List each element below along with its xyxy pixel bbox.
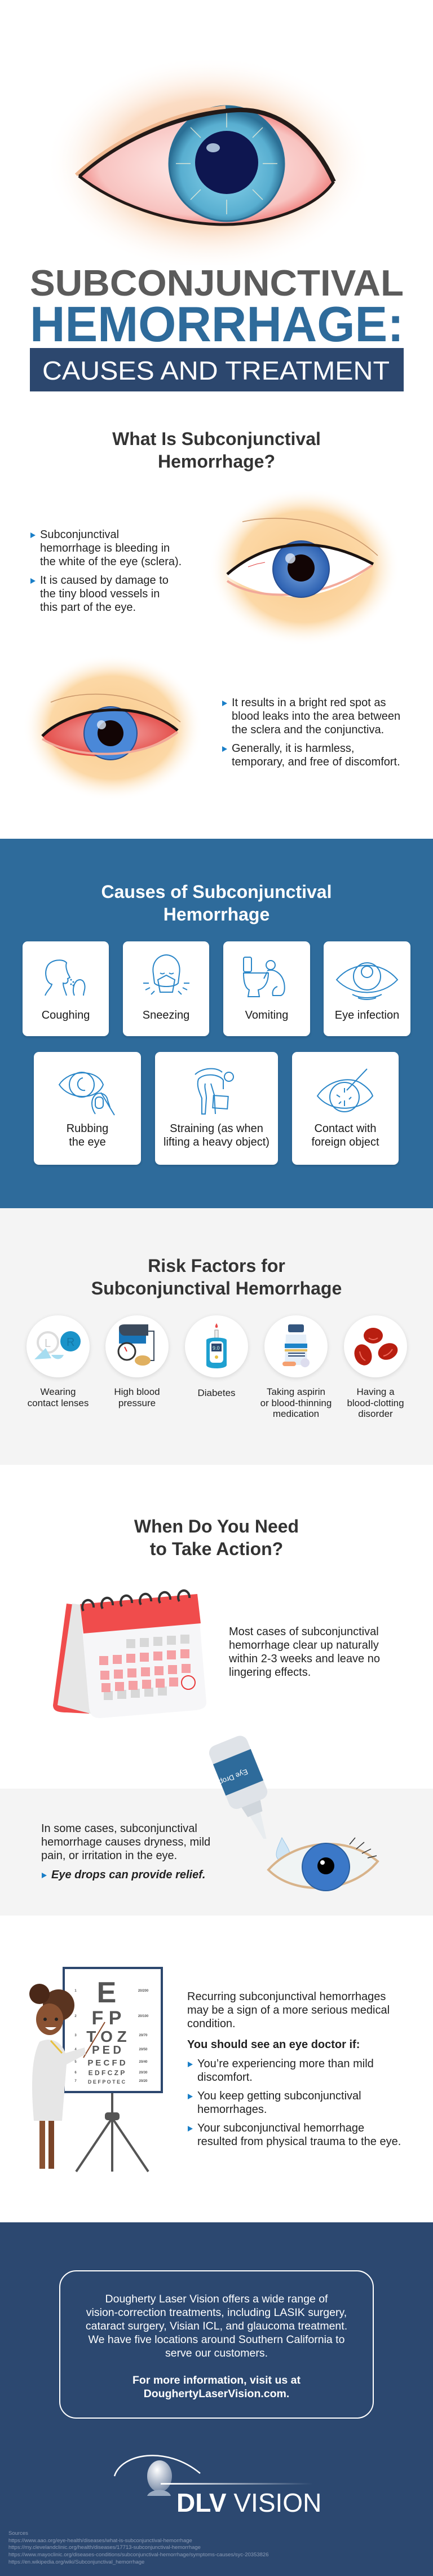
icon: doctor with eye chart: 4 [74,2048,77,2051]
heading: causes: Hemorrhage [164,904,269,924]
card: rubbing eye: Rubbing [67,1122,108,1135]
icon: doctor with eye chart: 20/100 [138,2015,149,2018]
callout: about DLV: Dougherty Laser Vision offers a wide range of [105,2293,328,2305]
hero: red eye illustration [69,72,347,255]
icon: doctor with eye chart: 20/40 [139,2060,148,2064]
text block: sources: https://www.aao.org/eye-health/diseases/what-is-subconjunctival-hemorrhage [8,2538,192,2544]
label: clotting: Having a [356,1386,395,1397]
icon: blood cells [344,1315,407,1377]
label: diabetes: Diabetes [197,1388,236,1398]
icon: doctor with eye chart: 20/70 [139,2034,148,2037]
icon: calendar [53,1589,206,1718]
icon: doctor with eye chart: P E D [92,2044,121,2057]
heading: causes [101,882,332,924]
text block: definition bullets [30,529,182,614]
text block: recurring & see doctor: discomfort. [197,2071,253,2084]
text block: recurring & see doctor: may be a sign of a more serious medical [187,2004,390,2016]
callout: about DLV: We have five locations around Southern California to [89,2333,344,2346]
label: blood pressure: pressure [118,1398,156,1408]
icon: doctor with eye chart: E [97,1976,116,2009]
card: coughing [23,941,109,1036]
card: vomiting: Vomiting [245,1009,288,1021]
card: rubbing eye: the eye [69,1136,106,1148]
label: contact lenses: contact lenses [28,1398,89,1408]
icon: doctor with eye chart: 3 [74,2034,77,2037]
panel: gray band [0,1789,433,1916]
icon: eye drops bottle [209,1736,267,1839]
text block: sources [8,2530,268,2565]
title [30,265,404,391]
card: foreign object: foreign object [311,1136,379,1148]
heading: risk factors: Risk Factors for [148,1256,285,1276]
heading: risk factors [91,1256,342,1298]
text block: sources: https://en.wikipedia.org/wiki/Subconjunctival_hemorrhage [8,2559,144,2565]
icon: doctor with eye chart: 20/30 [139,2071,148,2075]
label: clotting [347,1386,404,1419]
label: medication: Taking aspirin [267,1386,325,1397]
icon: doctor with eye chart: 7 [74,2080,77,2083]
heading: take action: to Take Action? [150,1539,283,1559]
text block: recurring & see doctor: You keep getting subconjunctival [197,2090,361,2102]
card: vomiting [223,941,310,1036]
icon: medication [264,1315,328,1377]
card: eye infection [324,941,410,1036]
icon: diabetes meter: 9.0 [213,1345,220,1351]
icon: doctor with eye chart: F P [92,2007,121,2029]
text block: definition bullets: hemorrhage is bleeding in [40,542,170,554]
icon: doctor with eye chart: 5 [74,2060,77,2064]
text block: definition bullets: the tiny blood vessels in [40,588,160,600]
text block: eye drops: In some cases, subconjunctival [41,1822,197,1835]
heading: take action: When Do You Need [134,1516,299,1536]
callout: about DLV: vision-correction treatments, including LASIK surgery, [86,2306,347,2319]
icon: contact lenses [26,1315,90,1377]
text block: recurring & see doctor [187,1991,401,2148]
text block: red spot bullets: the sclera and the conjunctiva. [232,724,384,736]
heading: what is [112,429,321,472]
icon: doctor with eye chart: 20/50 [139,2048,148,2051]
text block: recurring & see doctor: Recurring subconjunctival hemorrhages [187,1991,386,2003]
text block: definition bullets: the white of the eye (sclera). [40,556,182,568]
label: medication: or blood-thinning [260,1398,332,1408]
label: blood pressure: High blood [114,1386,160,1397]
text block: sources: https://my.clevelandclinic.org/health/diseases/17713-subconjunctival-hemorrhage [8,2544,201,2551]
icon: blood pressure [105,1315,169,1377]
panel: footer [0,2222,433,2576]
text block: eye drops [41,1822,210,1881]
label: medication: medication [273,1408,319,1419]
logo: DLV Vision: DLV VISION [176,2488,321,2517]
heading: take action [134,1516,299,1559]
heading: risk factors: Subconjunctival Hemorrhage [91,1278,342,1298]
label: contact lenses: Wearing [41,1386,76,1397]
text block: red spot bullets: temporary, and free of discomfort. [232,756,400,768]
icon: doctor with eye chart: E D F C Z P [89,2069,125,2077]
text block: recurring & see doctor: You’re experiencing more than mild [197,2058,374,2070]
heading: causes: Causes of Subconjunctival [101,882,332,902]
text block: clears up: within 2-3 weeks and leave no [229,1653,380,1665]
icon: red eye [30,661,195,794]
icon: doctor with eye chart: 20/20 [139,2080,148,2083]
text block: sources: https://www.mayoclinic.org/diseases-conditions/subconjunctival-hemorrhage/symptoms-causes/syc-20353826 [8,2552,268,2558]
label: blood pressure [114,1386,160,1408]
label: clotting: disorder [358,1408,393,1419]
text block: recurring & see doctor: hemorrhages. [197,2103,267,2116]
text block: definition bullets: this part of the eye. [40,601,136,614]
text block: definition bullets: It is caused by damage to [40,574,169,587]
text block: sources: Sources [8,2530,28,2537]
icon: doctor with eye chart [29,1967,163,2173]
panel: causes [0,839,433,1208]
label: medication [260,1386,332,1419]
label: clotting: blood-clotting [347,1398,404,1408]
text block: red spot bullets: blood leaks into the area between [232,710,400,723]
text block: red spot bullets: It results in a bright red spot as [232,697,386,709]
icon: contact lenses: R [67,1336,74,1349]
text block: red spot bullets [222,697,400,768]
callout: about DLV: DoughertyLaserVision.com. [144,2388,289,2400]
text block: recurring & see doctor: Your subconjunctival hemorrhage [197,2122,364,2134]
card: foreign object: Contact with [314,1122,377,1135]
card: eye infection: Eye infection [335,1009,399,1021]
icon: doctor with eye chart: T O Z [86,2028,127,2045]
icon: doctor with eye chart: 2 [74,2015,77,2018]
text block: clears up [229,1626,380,1679]
card: sneezing: Sneezing [143,1009,189,1021]
title: HEMORRHAGE: [30,296,404,352]
logo: DLV Vision [114,2455,321,2517]
callout: about DLV: serve our customers. [165,2347,268,2359]
text block: eye drops: pain, or irritation in the eye. [41,1850,177,1862]
label: contact lenses [28,1386,89,1408]
heading: what is: What Is Subconjunctival [112,429,321,449]
text block: eye drops: Eye drops can provide relief. [51,1869,205,1881]
icon: eye drops bottle: Eye Drops [214,1767,249,1788]
card: straining: lifting a heavy object) [164,1136,269,1148]
text block: eye drops: hemorrhage causes dryness, mild [41,1836,210,1848]
icon: normal eye [218,495,391,639]
text block: recurring & see doctor: condition. [187,2018,236,2030]
text block: recurring & see doctor: resulted from physical trauma to the eye. [197,2135,401,2148]
card: foreign object [292,1052,399,1165]
text block: definition bullets: Subconjunctival [40,529,119,541]
callout: about DLV: cataract surgery, Visian ICL, and glaucoma treatment. [86,2320,347,2332]
callout: about DLV [59,2270,374,2419]
heading: what is: Hemorrhage? [158,451,275,472]
callout: about DLV: For more information, visit us at [132,2374,301,2386]
icon: diabetes meter [185,1315,248,1377]
panel: risk factors [0,1208,433,1465]
text block: red spot bullets: Generally, it is harmless, [232,742,354,755]
text block: clears up: lingering effects. [229,1666,311,1679]
text block: clears up: Most cases of subconjunctival [229,1626,379,1638]
icon: doctor with eye chart: 6 [74,2071,77,2075]
icon: doctor with eye chart: P E C F D [87,2058,126,2068]
card: coughing: Coughing [42,1009,90,1021]
text block: clears up: hemorrhage clear up naturally [229,1639,379,1652]
icon: contact lenses: L [45,1337,51,1350]
icon: eye with drop [267,1837,379,1891]
icon: doctor with eye chart: 1 [74,1989,77,1993]
card: rubbing eye [34,1052,141,1165]
icon: doctor with eye chart: 20/200 [138,1989,149,1993]
icon: doctor with eye chart: D E F P O T E C [88,2079,126,2085]
card: straining: Straining (as when [170,1122,263,1135]
card: straining [155,1052,278,1165]
card: sneezing [123,941,209,1036]
title: CAUSES AND TREATMENT [42,356,390,385]
text block: recurring & see doctor: You should see an eye doctor if: [187,2038,360,2051]
